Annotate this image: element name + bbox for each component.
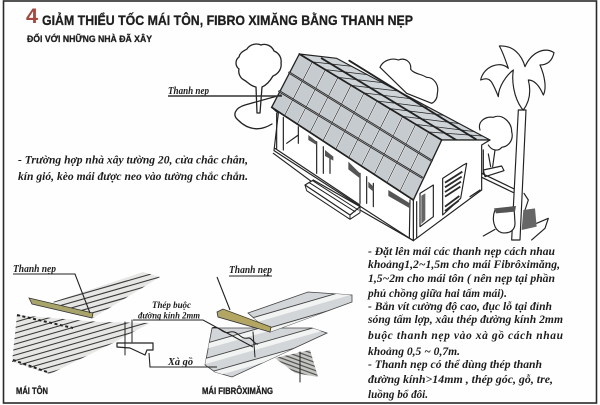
tie wire [125,320,132,355]
label: Thanh nẹp [168,86,209,97]
batten [217,309,271,332]
text block: installation instructions: đường kính>14mm , thép góc, gỗ, tre, [368,373,553,386]
batten highlights [279,73,432,177]
lower sheet scalloped edge [212,327,258,344]
roof battens: thanh nẹp [279,73,432,177]
text block: installation instructions: khoảng 0,5 ~ 0,7m. [368,346,460,358]
icon: water pot [493,207,515,233]
upper sheet [248,292,352,332]
tie wire [253,332,300,382]
upper sheet ribs [53,274,160,318]
text block: installation instructions [367,246,564,401]
upper sheet waves [253,294,351,332]
section number 4: 4 [26,5,38,28]
gable window [443,163,467,215]
palm fronds [481,46,554,110]
step lines [305,181,360,219]
panel dividers [284,62,429,191]
batten [29,298,93,318]
label: tie wire: đường kính 2mm [138,312,200,322]
panel: fibro cement roof [204,292,352,382]
palm trunk [512,110,526,240]
icon: tree ground [235,95,281,129]
text block: existing house condition: kín gió, kèo mái được neo vào tường chắc chắn. [18,170,248,183]
icon: jars [522,208,537,230]
lower sheet scalloped edges [13,315,73,372]
purlin [275,350,318,377]
text block: installation instructions: sóng tấm lợp, xâu thép đường kính 2mm [367,313,563,326]
back roof panel lines [312,62,482,136]
heading text: GIẢM THIỂU TỐC MÁI TÔN, FIBRO XIMĂNG BẰNG THANH NẸP [42,11,413,28]
front wall and verandah [272,107,413,241]
callout: thanh nẹp on house [168,44,282,129]
purlin wood grain [278,350,318,376]
gable wall [413,140,490,241]
water pot and garden items [483,150,548,240]
label: thanh nẹp, metal roof: Thanh nẹp [13,264,56,275]
text block: installation instructions: 1,5~2m cho mái tôn ( nên nẹp tại phần [368,272,555,285]
label: tie wire: Thép buộc [152,301,192,311]
icon: flower stand [483,150,504,177]
text block: existing house condition: - Trường hợp nhà xây tường 20, cửa chắc chắn, [18,154,248,166]
lower sheet [205,328,327,377]
title [26,5,413,28]
verandah posts and plinth [273,113,417,241]
pot rim [494,206,516,213]
icon: ground tools [483,193,548,240]
ground path behind palm [470,173,515,197]
door leaf [421,193,425,224]
front steps [305,180,360,215]
lower sheet waves [205,328,322,374]
text block: existing house condition [18,154,248,183]
purlin [117,343,153,355]
front roof slope [272,54,442,200]
caption: fibro roof: MÁI FIBRÔXIMĂNG [202,385,273,397]
text block: installation instructions: - Thanh nẹp có thể dùng thép thanh [368,358,542,371]
purlin body [275,350,318,377]
lower sheet ribs [12,315,148,374]
panel: corrugated metal roof [12,272,160,374]
front roof panel gaps [284,62,429,191]
label: purlin: Xà gồ [167,357,193,368]
roof eave [272,54,442,200]
upper sheet [53,272,160,318]
text block: installation instructions: - Bắn vít cường độ cao, đục lỗ tại đỉnh [368,300,552,313]
caption: metal roof: MÁI TÔN [16,385,48,397]
gable door [420,185,433,227]
lower sheet [12,315,150,374]
window slats [445,172,462,211]
label: thanh nẹp, fibro roof: Thanh nẹp [229,265,272,276]
subtitle: ĐỐI VỚI NHỮNG NHÀ ĐÃ XÂY [27,33,153,45]
back roof battens [322,58,476,141]
house illustration [272,46,554,241]
text block: installation instructions: luồng bổ đôi. [368,388,428,401]
back roof slope [299,54,490,140]
text block: installation instructions: - Đặt lên mái các thanh nẹp cách nhau [368,246,556,258]
icon: small tree right [479,116,512,150]
icon: left tree [236,44,281,113]
icon: background tree behind roof [380,59,438,103]
label: tie wire [138,301,200,322]
leader line [168,95,282,97]
text block: installation instructions: buộc thanh nẹp vào xà gồ cách nhau [368,329,564,342]
text block: installation instructions: khoảng1,2~1,5m cho mái Fibrôximăng, [368,259,560,271]
text block: installation instructions: phủ chồng giữa hai tấm mái). [367,287,507,300]
wall openings [308,135,410,208]
leader lines [13,274,272,367]
